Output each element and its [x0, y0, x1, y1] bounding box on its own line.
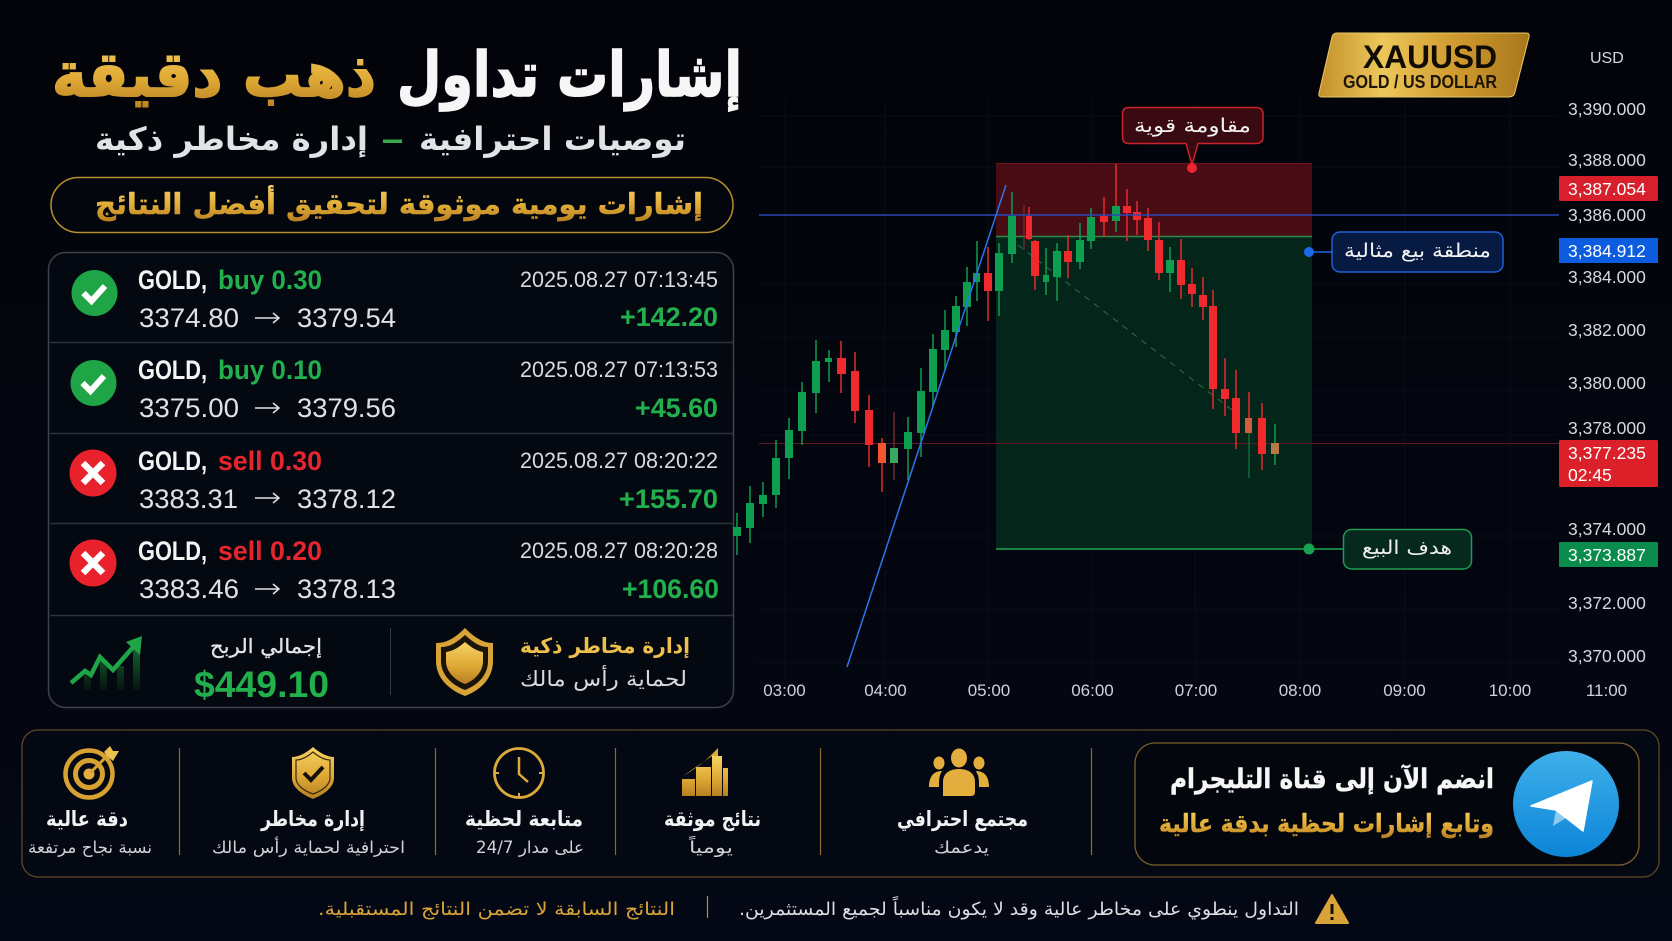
feature: live follow-up [465, 748, 584, 858]
panel: trades [48, 252, 734, 708]
price axis [1559, 50, 1658, 666]
price tag: green: 3,373.887 [1568, 545, 1646, 565]
trade row 3: GOLD, [138, 446, 207, 476]
feature: community: يدعمك [934, 838, 989, 857]
risk management: لحماية رأس مالك [520, 665, 687, 691]
icon: target [66, 746, 119, 798]
symbol badge: GOLD / US DOLLAR [1343, 71, 1497, 92]
trade row 4: 2025.08.27 08:20:28 [520, 538, 718, 563]
feature: accuracy: دقة عالية [46, 807, 128, 831]
trade row 2: +45.60 [635, 393, 718, 423]
time axis [763, 681, 1627, 700]
time axis: 10:00 [1489, 681, 1531, 700]
callout: sell target: هدف البيع [1362, 537, 1452, 559]
price axis: 3,374.000 [1568, 519, 1646, 539]
time axis: 07:00 [1175, 681, 1217, 700]
trend line [847, 185, 1006, 667]
trade row 2 [70, 355, 718, 423]
feature: documented results: يومياً [688, 835, 734, 858]
risk management [436, 628, 690, 696]
total profit: إجمالي الربح [210, 634, 322, 659]
trade row 3: 2025.08.27 08:20:22 [520, 448, 718, 473]
telegram call to action: وتابع إشارات لحظية بدقة عالية [1159, 809, 1494, 839]
time axis: 06:00 [1071, 681, 1114, 700]
trade row 2: 2025.08.27 07:13:53 [520, 357, 718, 382]
feature: community [897, 748, 1028, 857]
feature: community: مجتمع احترافي [897, 807, 1028, 831]
disclaimer [318, 895, 1348, 923]
trade row 3: 3378.12 [297, 484, 396, 514]
price axis: 3,390.000 [1568, 99, 1646, 119]
symbol badge: XAUUSD [1363, 39, 1497, 75]
sell zone [996, 163, 1312, 549]
price tag: current [1559, 440, 1658, 487]
price axis: 3,386.000 [1568, 205, 1646, 225]
title: ذهب دقيقة [52, 38, 376, 111]
price tag: green [1559, 542, 1658, 567]
trade row 3: 3383.31 [139, 484, 238, 514]
price tag: red [1559, 176, 1658, 201]
price tag: blue [1559, 238, 1658, 263]
risk management: إدارة مخاطر ذكية [520, 634, 690, 658]
trade row 1: +142.20 [620, 302, 718, 332]
panel: features band [22, 730, 1659, 877]
level lines [759, 245, 1559, 444]
trade row 3 [70, 446, 718, 514]
price axis: 3,378.000 [1568, 418, 1646, 438]
callout: strong resistance [1122, 108, 1263, 173]
price tag: red: 3,387.054 [1568, 179, 1646, 199]
icon: people [929, 748, 989, 796]
telegram call to action [1135, 743, 1639, 865]
feature: risk: احترافية لحماية رأس مالك [212, 836, 405, 858]
telegram call to action: انضم الآن إلى قناة التليجرام [1170, 764, 1494, 795]
price axis: 3,384.000 [1568, 267, 1646, 287]
icon: shield [436, 628, 493, 696]
time axis: 08:00 [1279, 681, 1321, 700]
total profit [71, 634, 329, 705]
price axis: 3,380.000 [1568, 373, 1646, 393]
callout: sell target [996, 530, 1472, 569]
subtitle: إدارة مخاطر ذكية [95, 120, 368, 159]
time axis: 11:00 [1586, 681, 1627, 700]
price axis: 3,388.000 [1568, 150, 1646, 170]
time axis: 03:00 [763, 681, 806, 700]
subtitle: توصيات احترافية [419, 120, 686, 158]
price axis: 3,382.000 [1568, 320, 1646, 340]
total profit: $449.10 [194, 664, 329, 705]
title: إشارات تداول [397, 38, 742, 111]
icon: check [70, 360, 116, 406]
trade row 3: +155.70 [619, 484, 718, 514]
price tag: blue: 3,384.912 [1568, 241, 1646, 261]
trade row 4: +106.60 [622, 574, 719, 604]
time axis: 05:00 [968, 681, 1010, 700]
trade row 1: GOLD, [138, 265, 207, 295]
icon: shield check [292, 747, 334, 799]
icon: clock [494, 748, 544, 798]
slogan pill [51, 178, 733, 232]
disclaimer: التداول ينطوي على مخاطر عالية وقد لا يكون مناسباً لجميع المستثمرين. [739, 896, 1299, 920]
price axis: USD [1590, 50, 1624, 67]
time axis: 09:00 [1383, 681, 1426, 700]
trade row 1: buy 0.30 [218, 265, 322, 295]
trade row 4: sell 0.20 [218, 536, 322, 566]
chart [733, 33, 1658, 700]
blue horizontal line [759, 214, 1559, 216]
trade row 1 [72, 265, 718, 333]
icon: bars [682, 748, 728, 796]
candlesticks [733, 164, 1279, 555]
icon: check [72, 270, 118, 316]
trade row 2: buy 0.10 [218, 355, 322, 385]
icon: growth chart [71, 636, 142, 690]
callout: ideal sell zone: منطقة بيع مثالية [1344, 240, 1491, 262]
price tag: current: 3,377.235 [1568, 443, 1646, 463]
trade row 4: 3378.13 [297, 574, 396, 604]
feature: risk: إدارة مخاطر [260, 807, 365, 831]
icon: telegram [1513, 751, 1619, 857]
price tag: current: 02:45 [1568, 465, 1612, 485]
trade row 2: GOLD, [138, 355, 207, 385]
subtitle [95, 120, 686, 159]
trade row 4: GOLD, [138, 536, 207, 566]
trade row 3: sell 0.30 [218, 446, 322, 476]
slogan pill: إشارات يومية موثوقة لتحقيق أفضل النتائج [95, 185, 703, 222]
trade row 2: 3375.00 [139, 393, 239, 423]
feature: accuracy [28, 746, 152, 858]
trade row 2: 3379.56 [297, 393, 396, 423]
icon: cross [70, 450, 116, 496]
symbol badge [1319, 33, 1529, 97]
price axis: 3,370.000 [1568, 646, 1646, 666]
trade row 1: 3374.80 [139, 303, 239, 333]
feature: live follow-up: متابعة لحظية [465, 807, 583, 831]
feature: risk [212, 747, 405, 858]
trade row 4 [70, 536, 719, 604]
time axis: 04:00 [864, 681, 907, 700]
price axis: 3,372.000 [1568, 593, 1646, 613]
callout: ideal sell zone [1304, 232, 1503, 272]
icon: warning [1316, 895, 1348, 923]
trade row 1: 2025.08.27 07:13:45 [520, 267, 718, 292]
callout: strong resistance: مقاومة قوية [1134, 115, 1251, 137]
title [52, 38, 742, 111]
trade row 1: 3379.54 [297, 303, 396, 333]
disclaimer: النتائج السابقة لا تضمن النتائج المستقبلية. [318, 899, 675, 920]
trade row 4: 3383.46 [139, 574, 239, 604]
feature: documented results: نتائج موثقة [664, 807, 761, 831]
feature: live follow-up: على مدار 24/7 [476, 838, 584, 858]
feature: accuracy: نسبة نجاح مرتفعة [28, 838, 152, 858]
icon: cross [70, 540, 116, 586]
feature: documented results [664, 748, 761, 858]
